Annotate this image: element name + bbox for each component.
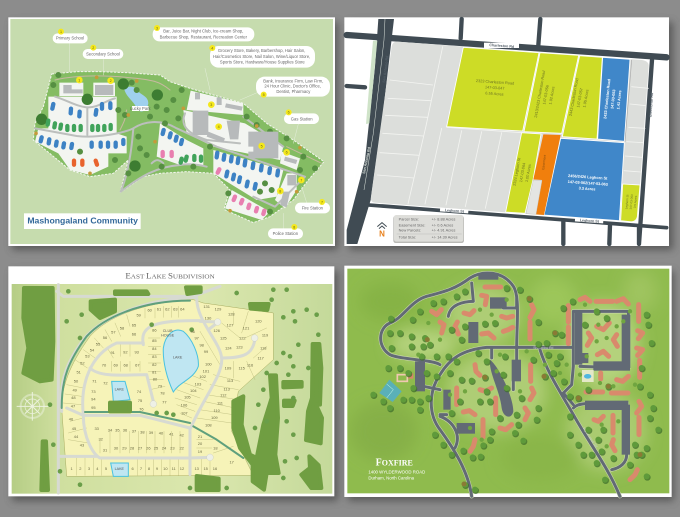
panel: Charleston Road parcel map: 147-03-053 xyxy=(610,89,616,109)
lot numbers: 47 xyxy=(71,403,76,408)
lot numbers: 118 xyxy=(260,346,267,351)
panel: Charleston Road parcel map: 147-03-062/147-03-063 xyxy=(568,180,608,187)
lot numbers: 27 xyxy=(138,446,143,451)
lot numbers: 57 xyxy=(111,329,116,334)
panel: Charleston Road parcel map: 1.41 Acres xyxy=(616,90,622,110)
lot numbers: 99 xyxy=(204,349,209,354)
callout text: Hair/Cosmetics Store, Nail Salon, Wine/Liquor Store, xyxy=(213,54,310,59)
callout text: Grocery Store, Bakery, Barbershop, Hair Salon, xyxy=(218,48,305,53)
lot numbers: 98 xyxy=(199,342,205,347)
panel: Charleston Road parcel map: 3.3 Acres xyxy=(579,186,596,192)
lot numbers: 75 xyxy=(138,398,143,403)
cul-de-sacs xyxy=(150,319,258,461)
north arrow xyxy=(377,223,387,239)
parcel labels: 147-03-056 xyxy=(542,85,550,105)
lot numbers: 48 xyxy=(71,395,76,400)
marker numbers: 5 xyxy=(261,144,263,148)
lot numbers: 5 xyxy=(105,466,108,471)
lot numbers: 60 xyxy=(147,307,153,312)
lot numbers: 78 xyxy=(160,391,165,396)
lot numbers: 129 xyxy=(215,307,222,312)
lot numbers: 76 xyxy=(139,407,144,412)
lot numbers: 53 xyxy=(85,353,90,358)
lot numbers: 86 xyxy=(152,327,157,332)
marker numbers: 3 xyxy=(210,103,212,107)
marker numbers: 7 xyxy=(300,178,302,182)
lot numbers: 41 xyxy=(169,431,174,436)
parcel labels: 2323 Charleston Road xyxy=(476,79,514,86)
roads xyxy=(347,19,667,244)
lot numbers: 81 xyxy=(152,370,157,375)
marker numbers xyxy=(60,26,323,229)
lot numbers: 33 xyxy=(94,426,100,431)
marker numbers: 7 xyxy=(321,200,323,204)
lot numbers: 109 xyxy=(225,366,232,371)
callout text: 24 Hour Clinic, Doctor's Office, xyxy=(264,84,321,89)
lot numbers: 84 xyxy=(152,346,157,351)
lot numbers: 61 xyxy=(157,307,162,312)
parcel labels: 0.5 Acres xyxy=(633,195,638,208)
autumn trees xyxy=(427,299,640,484)
woodland blobs xyxy=(23,287,322,490)
lot numbers: 66 xyxy=(132,332,137,337)
lot numbers: 44 xyxy=(74,434,79,439)
parcel labels: 147-03-060 xyxy=(629,194,634,210)
lake xyxy=(124,87,148,111)
lot numbers: 107 xyxy=(181,411,188,416)
tennis courts xyxy=(379,380,402,402)
legend box: Parcel Size: xyxy=(399,218,419,222)
lot numbers: 131 xyxy=(203,304,211,309)
panel: Mashongaland Community map xyxy=(8,17,335,246)
parking lots xyxy=(415,273,630,455)
lot numbers: 77 xyxy=(162,399,167,404)
lot numbers: 62 xyxy=(165,307,170,312)
lot numbers: 126 xyxy=(213,328,221,333)
lot numbers: 17 xyxy=(229,459,235,464)
parcel labels: 1.00 Acres xyxy=(525,164,532,182)
lot numbers: 31 xyxy=(103,447,108,452)
lot numbers: 55 xyxy=(96,341,101,346)
residential lots and commercial blocks xyxy=(35,83,300,220)
callout text: Bank, Insurance Firm, Law Firm, xyxy=(263,78,323,83)
lot numbers: 104 xyxy=(190,388,197,393)
lot lines xyxy=(63,306,267,475)
road labels: Greenbriar Rd xyxy=(648,93,654,117)
remainder strip xyxy=(526,180,542,214)
panel: Charleston Road parcel map xyxy=(344,17,669,246)
tree shadows xyxy=(374,289,659,491)
panel: Foxfire site plan: Wylderwood Rd xyxy=(582,427,598,448)
lot numbers: 30 xyxy=(114,446,119,451)
panel: Charleston Road parcel map: 2433 Charleston Road xyxy=(603,78,611,119)
callout text: Fire Station xyxy=(302,205,324,210)
lot numbers: 25 xyxy=(154,446,159,451)
road label: Sherwood Rd xyxy=(533,346,554,350)
lot numbers xyxy=(69,304,269,471)
road labels: Charleston Rd xyxy=(489,43,514,49)
lot numbers: 26 xyxy=(146,446,151,451)
map title xyxy=(24,213,141,229)
road labels: Leghorn St xyxy=(580,218,600,224)
lot numbers: 108 xyxy=(205,422,212,427)
callout text: Barbecue Shop, Restaurant, Recreation Center xyxy=(160,35,248,40)
road labels xyxy=(362,43,654,224)
legend box: +/- 4.91 Acres xyxy=(432,229,455,233)
lot numbers: 63 xyxy=(173,307,178,312)
legend box: Easement Size: xyxy=(399,223,425,227)
north arrow: N xyxy=(379,230,385,239)
lot numbers: 91 xyxy=(110,350,116,355)
easement xyxy=(533,134,561,215)
lot numbers: 11 xyxy=(172,466,177,471)
trees xyxy=(373,288,658,490)
callout text xyxy=(56,28,324,236)
site title xyxy=(368,457,425,481)
numbered markers xyxy=(58,25,325,230)
lot numbers: 9 xyxy=(156,466,159,471)
lot numbers: 20 xyxy=(198,441,203,446)
site title: FOXFIRE xyxy=(376,457,413,468)
lot numbers: 100 xyxy=(205,361,212,366)
parcels base xyxy=(371,42,649,222)
lot numbers: 80 xyxy=(153,377,158,382)
callout text: Sports Store, Hardware/House Supplies Store xyxy=(220,60,305,65)
parcel labels: 147-03-057 xyxy=(576,88,584,108)
panel: East Lake Subdivision plat xyxy=(8,266,334,496)
lot numbers: 113 xyxy=(223,386,231,391)
trees xyxy=(40,75,315,212)
roads xyxy=(57,285,255,493)
blue parcels xyxy=(544,57,630,221)
community land area xyxy=(33,72,324,223)
road labels: San Antonio Rd xyxy=(382,55,389,83)
legend box xyxy=(393,215,464,243)
panel: Charleston Road parcel map: 2456/2426 Leghorn St xyxy=(568,174,608,181)
lot numbers: 79 xyxy=(158,383,163,388)
parcel labels: 2443 Charleston Road xyxy=(569,78,579,116)
site title: 1400 WYLDERWOOD ROAD xyxy=(368,469,425,474)
legend box: Total Size: xyxy=(399,236,416,240)
lot numbers: 112 xyxy=(220,393,227,398)
marker numbers: 4 xyxy=(211,46,213,50)
lot numbers: 97 xyxy=(194,336,200,341)
lot numbers: 111 xyxy=(217,401,224,406)
lot numbers: 50 xyxy=(74,378,79,383)
callout text: Gas Station xyxy=(291,116,313,121)
lot numbers: 18 xyxy=(213,446,218,451)
lot numbers: 51 xyxy=(76,370,82,375)
lake labels: LAKE xyxy=(115,467,125,471)
marker numbers: 2 xyxy=(92,46,94,50)
lot numbers: 116 xyxy=(247,362,254,367)
lot numbers: 52 xyxy=(80,361,85,366)
parcel divisions xyxy=(377,47,648,208)
lot numbers: 105 xyxy=(184,395,191,400)
pool xyxy=(582,370,594,382)
lot numbers: 72 xyxy=(103,381,108,386)
lot numbers: 127 xyxy=(227,322,234,327)
callout text: Secondary School xyxy=(86,51,120,56)
parcel labels xyxy=(476,70,638,210)
callout text: Primary School xyxy=(56,36,84,41)
lot numbers: 113 xyxy=(227,378,234,383)
lot numbers: 125 xyxy=(220,336,227,341)
lot numbers: 37 xyxy=(132,429,137,434)
lakes xyxy=(111,330,198,476)
lot numbers: 13 xyxy=(194,466,200,471)
lot numbers: 69 xyxy=(113,363,119,368)
marker numbers: 2 xyxy=(110,79,112,83)
lot numbers: 120 xyxy=(255,318,262,323)
lot numbers: 123 xyxy=(236,345,243,350)
lot numbers: 122 xyxy=(239,336,246,341)
lot numbers: 32 xyxy=(98,436,104,441)
lot numbers: 2 xyxy=(79,466,82,471)
lot numbers: 54 xyxy=(90,347,95,352)
lot numbers: 117 xyxy=(257,356,265,361)
lot numbers: 65 xyxy=(132,322,137,327)
lot numbers: 109 xyxy=(211,415,218,420)
lot numbers: 23 xyxy=(170,446,175,451)
lot numbers: 96 xyxy=(190,329,196,334)
lot numbers: 124 xyxy=(225,346,232,351)
park label xyxy=(132,106,149,111)
marker numbers: 5 xyxy=(263,93,265,97)
map ground xyxy=(12,284,332,494)
lake labels: LAKE xyxy=(173,356,183,360)
lake labels xyxy=(115,329,183,471)
road labels: Leghorn St xyxy=(445,208,465,214)
apartment buildings xyxy=(432,287,643,480)
legend box: +/- 0.6 Acres xyxy=(432,223,453,227)
lot numbers: 6 xyxy=(132,466,135,471)
lot numbers: 4 xyxy=(96,466,99,471)
lot numbers: 16 xyxy=(213,466,218,471)
lot numbers: 103 xyxy=(195,382,202,387)
lot numbers: 21 xyxy=(198,434,203,439)
lots area xyxy=(62,300,273,476)
legend box: New Parcels: xyxy=(399,229,421,233)
lot numbers: 94 xyxy=(91,397,96,402)
lot numbers: 34 xyxy=(108,427,113,432)
callout text: Dentist, Pharmacy xyxy=(276,89,311,94)
lot numbers: 95 xyxy=(91,405,96,410)
panel: Mashongaland Community map: Mashongaland Community xyxy=(27,215,138,225)
lot numbers: 46 xyxy=(69,417,74,422)
lot numbers: 101 xyxy=(203,368,210,373)
lot numbers: 38 xyxy=(140,429,145,434)
lot numbers: 92 xyxy=(123,349,128,354)
marker numbers: 1 xyxy=(78,78,80,82)
lot numbers: 119 xyxy=(262,332,269,337)
parcel labels: Easement xyxy=(541,154,547,170)
marker numbers: 3 xyxy=(156,26,158,30)
lot numbers: 45 xyxy=(72,426,77,431)
clubhouse xyxy=(397,373,413,381)
lot numbers: 56 xyxy=(103,335,108,340)
parcel labels: 147-03-047 xyxy=(485,85,505,91)
lot numbers: 110 xyxy=(213,408,221,413)
lot numbers: 67 xyxy=(135,363,140,368)
lot numbers: 29 xyxy=(122,446,127,451)
road labels: San Antonio Rd xyxy=(362,147,371,174)
lot numbers: 130 xyxy=(205,315,212,320)
lot numbers: 64 xyxy=(180,307,185,312)
lot numbers: 85 xyxy=(152,338,157,343)
lot numbers: 121 xyxy=(243,326,250,331)
roads xyxy=(381,273,628,496)
scattered trees xyxy=(50,290,318,488)
lot numbers: 83 xyxy=(152,354,157,359)
lime parcels xyxy=(447,47,640,222)
lot numbers: 7 xyxy=(140,466,143,471)
panel title: EAST LAKE SUBDIVISION xyxy=(125,272,215,281)
parcel labels: Leghorn St xyxy=(624,194,630,209)
lot numbers: 8 xyxy=(148,466,151,471)
marker numbers: 6 xyxy=(288,111,290,115)
lot numbers: 68 xyxy=(123,363,129,368)
houses xyxy=(41,103,278,189)
ground mottling xyxy=(350,271,657,481)
parcel labels: 2324 Leghorn St xyxy=(513,157,522,186)
lake labels: LAKE xyxy=(115,388,125,392)
parcel labels: 6.55 Acres xyxy=(485,91,504,97)
lot numbers: 1 xyxy=(71,466,74,471)
lot numbers: 106 xyxy=(181,402,188,407)
lot numbers: 59 xyxy=(136,313,142,318)
stream xyxy=(62,301,243,458)
roads xyxy=(35,97,305,207)
callout text: Bar, Juice Bar, Night Club, Ice-cream Shop, xyxy=(163,28,243,33)
lot numbers: 15 xyxy=(203,466,209,471)
lot numbers: 74 xyxy=(137,389,142,394)
marker numbers: 4 xyxy=(218,125,220,129)
lot numbers: 128 xyxy=(228,312,235,317)
lot numbers: 12 xyxy=(180,466,185,471)
lot numbers: 10 xyxy=(163,466,168,471)
lot numbers: 40 xyxy=(159,431,164,436)
parcel labels: 1.92 Acres xyxy=(548,86,556,105)
lot numbers: 71 xyxy=(92,378,97,383)
marker numbers: 8 xyxy=(293,225,295,229)
lot numbers: 39 xyxy=(149,430,154,435)
panel: Foxfire site plan xyxy=(344,266,672,497)
leader lines xyxy=(69,43,310,228)
marker numbers: 1 xyxy=(60,30,62,34)
lot numbers: 24 xyxy=(162,446,167,451)
legend box: +/- 8.88 Acres xyxy=(432,218,455,222)
lot numbers: 58 xyxy=(120,325,125,330)
marker numbers: 6 xyxy=(286,151,288,155)
lot numbers: 102 xyxy=(199,374,207,379)
panel: Mashongaland Community map: Lucky Park xyxy=(130,106,152,111)
lot numbers: 28 xyxy=(130,446,135,451)
parcel labels: 2413/2423 Charleston Road xyxy=(534,70,546,118)
lot numbers: 115 xyxy=(238,366,246,371)
callout text: Police Station xyxy=(273,231,299,236)
marker numbers: 8 xyxy=(279,189,281,193)
lot numbers: 36 xyxy=(123,427,128,432)
lot numbers: 49 xyxy=(72,387,78,392)
San Antonio Road xyxy=(347,19,394,244)
lot numbers: 3 xyxy=(88,466,91,471)
lot numbers: 70 xyxy=(102,363,107,368)
callouts xyxy=(53,27,330,239)
lot numbers: 73 xyxy=(91,389,96,394)
compass rose xyxy=(17,392,48,421)
lot numbers: 43 xyxy=(80,443,85,448)
road edges xyxy=(381,273,628,496)
parcel labels: 147-03-064 xyxy=(519,162,527,182)
lot numbers: 22 xyxy=(179,446,185,451)
lot numbers: 35 xyxy=(115,427,120,432)
lake labels: CLUB xyxy=(163,329,173,333)
lot numbers: 19 xyxy=(198,449,203,454)
legend box: +/- 14.39 Acres xyxy=(432,236,458,240)
lot numbers: 93 xyxy=(134,349,140,354)
parcel labels: 1.95 Acres xyxy=(582,89,590,108)
lake labels: HOUSE xyxy=(161,334,175,338)
small trees xyxy=(418,300,635,446)
lot numbers: 42 xyxy=(179,433,185,438)
site title: Durham, North Carolina xyxy=(368,476,415,481)
buildings xyxy=(63,85,297,207)
lot numbers: 82 xyxy=(152,362,157,367)
